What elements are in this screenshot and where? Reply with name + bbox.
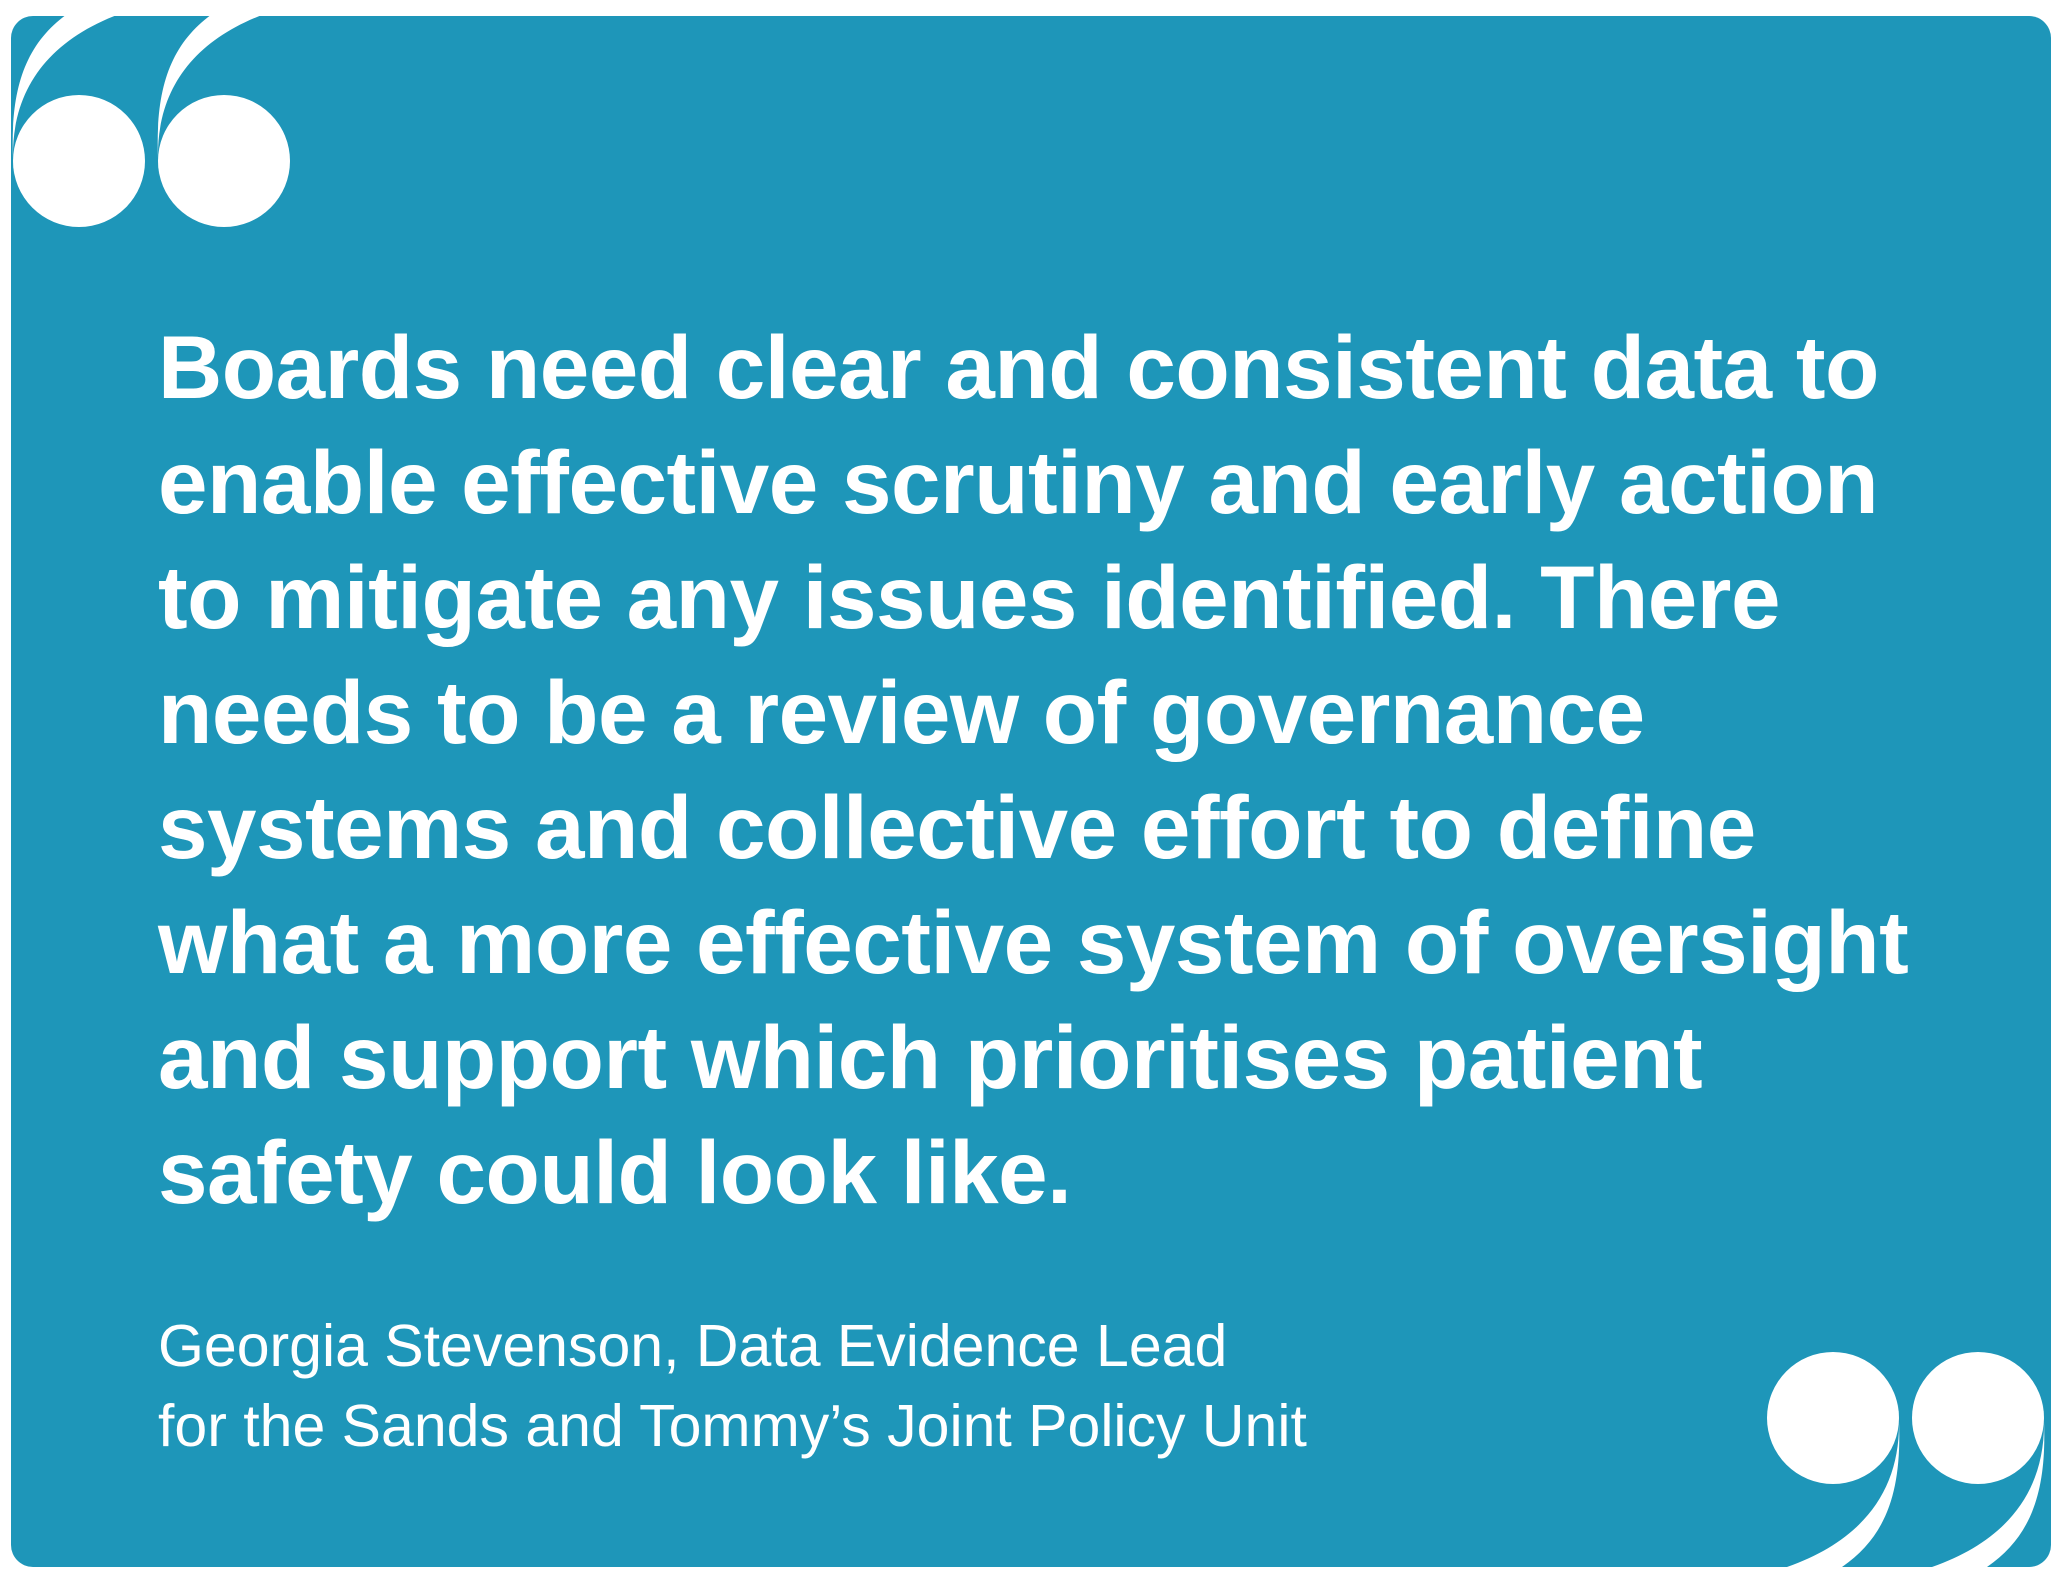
text block: quote: needs to be a review of governance (158, 662, 1645, 762)
text block: quote: systems and collective effort to define (158, 777, 1756, 877)
text block: quote: to mitigate any issues identified. There (158, 547, 1780, 647)
text block: attribution: Georgia Stevenson, Data Evidence Lead (158, 1313, 1227, 1379)
text block: quote: Boards need clear and consistent data to (158, 317, 1879, 417)
text block: quote: enable effective scrutiny and early action (158, 432, 1878, 532)
text block: quote: and support which prioritises patient (158, 1007, 1702, 1107)
text block: quote (158, 317, 1908, 1222)
text block: attribution (158, 1313, 1307, 1459)
text block: quote: safety could look like. (158, 1122, 1071, 1222)
text block: attribution: for the Sands and Tommy’s Joint Policy Unit (158, 1393, 1307, 1459)
text block: quote: what a more effective system of oversight (158, 892, 1908, 992)
